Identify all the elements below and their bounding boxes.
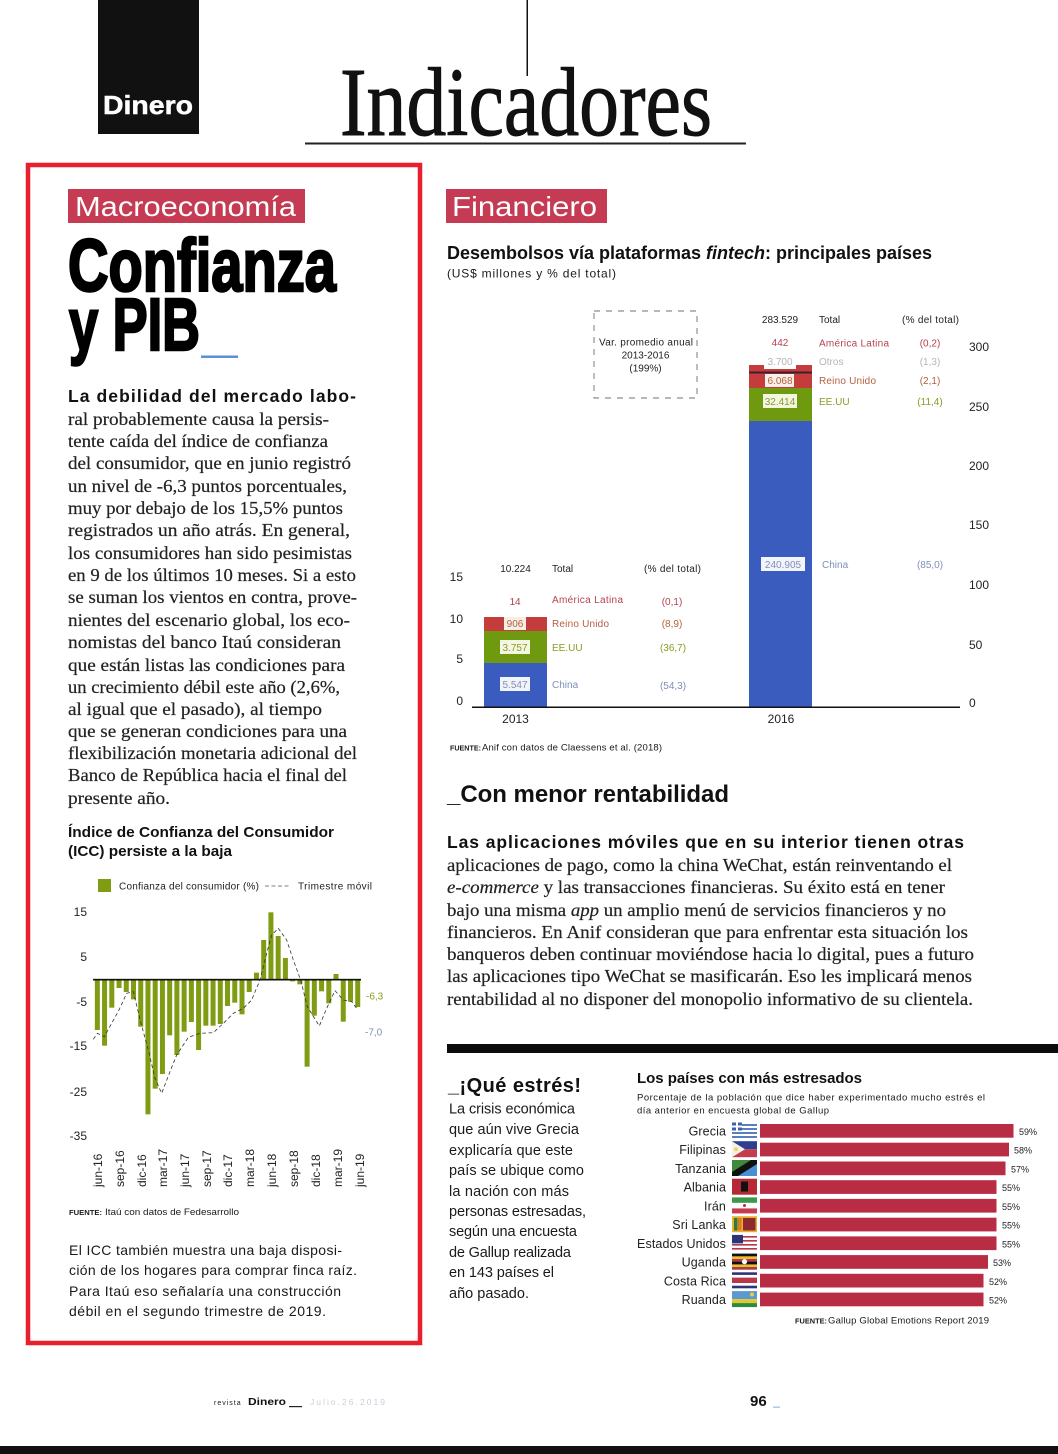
text block: financial article: bajo una misma app un amplio menú de servicios financieros y no — [447, 900, 946, 920]
text block: Qué estrés — [447, 1075, 586, 1302]
left axis: 2013 scale: 15 — [450, 570, 463, 584]
text block: ICC note: Para Itaú eso señalaría una construcción — [69, 1283, 341, 1299]
text block: financial article — [447, 832, 974, 1009]
data labels: 2013: 10.224 — [500, 564, 531, 575]
value labels: stress: 52% — [989, 1277, 1007, 1287]
text block: Qué estrés: en 143 países el — [449, 1265, 554, 1281]
data labels: 2013: Reino Unido — [552, 619, 609, 630]
chart title: fintech — [447, 243, 932, 280]
data labels: 2016: (% del total) — [902, 315, 959, 326]
data labels: 2016: 442 — [772, 338, 789, 349]
country labels: Filipinas — [679, 1143, 726, 1157]
text block: macro article — [68, 386, 357, 808]
flag: Costa Rica — [732, 1272, 757, 1288]
legend: ICC chart: Trimestre móvil — [298, 882, 372, 892]
data labels: 2013: EE.UU — [552, 643, 583, 654]
source: stress chart: Gallup Global Emotions Report 2019 — [828, 1316, 989, 1326]
text block: Qué estrés: de Gallup realizada — [449, 1245, 572, 1261]
right axis: 2016 scale: 200 — [969, 459, 989, 473]
data labels: 2016: (85,0) — [917, 560, 943, 571]
x axis: ICC chart: jun-18 — [265, 1153, 279, 1188]
bar: 2016 — [749, 357, 812, 707]
text block: financial article: aplicaciones de pago, como la china WeChat, están reinventando el — [447, 855, 952, 875]
bar: 2013 — [484, 617, 547, 707]
footer: Dinero — [248, 1396, 286, 1408]
logo: Dinero — [98, 0, 199, 134]
bar: 2013: 5.547 — [502, 680, 528, 691]
text block: Qué estrés: país se ubique como — [449, 1163, 584, 1179]
text block: Qué estrés: que aún vive Grecia — [449, 1122, 580, 1138]
y axis: ICC chart — [70, 905, 87, 1143]
data labels: 2013: China — [552, 680, 579, 691]
left axis: 2013 scale: 10 — [450, 612, 463, 626]
flag: Sri Lanka — [732, 1216, 757, 1232]
data labels: 2016: EE.UU — [819, 397, 850, 408]
value labels: stress: 55% — [1002, 1183, 1020, 1193]
y axis: ICC chart: -25 — [70, 1085, 87, 1099]
bar: 2016: 32.414 — [765, 397, 796, 408]
text block: financial article: financieros. En Anif consideran que para enfrentar esta situación los — [447, 922, 968, 942]
flag: Ruanda — [732, 1291, 757, 1307]
text block: macro article: tente caída del índice de confianza — [68, 431, 328, 451]
y axis: ICC chart: -35 — [70, 1129, 87, 1143]
data labels: 2013: 14 — [509, 597, 521, 608]
value labels: stress: 57% — [1011, 1164, 1029, 1174]
left axis: 2013 scale: 5 — [456, 652, 463, 666]
text block: financial article: banqueros deben continuar moviéndose hacia lo digital, pues a futuro — [447, 944, 974, 964]
text block: Qué estrés: _¡Qué estrés! — [447, 1075, 581, 1097]
right axis: 2016 scale: 0 — [969, 696, 976, 710]
text block: macro article: se suman los vientos en contra, prove- — [68, 587, 357, 607]
text block: ICC note: ción de los hogares para comprar finca raíz. — [69, 1262, 357, 1278]
text block: macro article: flexibilización monetaria adicional del — [68, 743, 357, 763]
panel: Macroeconomía — [28, 165, 420, 1343]
flag: Uganda — [732, 1254, 757, 1270]
x axis: years: 2016 — [768, 712, 795, 726]
y axis: ICC chart: 5 — [80, 950, 87, 964]
heading: Con menor rentabilidad: _Con menor rentabilidad — [446, 781, 729, 808]
x axis: ICC chart: mar-18 — [243, 1149, 257, 1187]
text block: macro article: registrados un año atrás. En general, — [68, 520, 350, 540]
right axis: 2016 scale: 50 — [969, 638, 983, 652]
text block: macro article: un nivel de -6,3 puntos porcentuales, — [68, 476, 347, 496]
bar: 2016: 240.905 — [765, 560, 802, 571]
source: stress chart: FUENTE: — [795, 1316, 827, 1326]
callout: average annual change — [594, 311, 697, 398]
country labels: Grecia — [689, 1124, 726, 1138]
section tag: Macroeconomía: Macroeconomía — [75, 191, 296, 222]
x axis: ICC chart: jun-19 — [353, 1153, 367, 1188]
footer: 96 — [750, 1393, 767, 1410]
callouts: latest values: -7,0 — [365, 1028, 383, 1038]
bar: 2013: 906 — [507, 619, 524, 630]
data labels: 2013 — [500, 564, 701, 692]
footer: revista — [214, 1400, 242, 1407]
data labels: 2013: América Latina — [552, 595, 623, 606]
legend: ICC chart — [98, 879, 372, 892]
text block: macro article: nomistas del banco Itaú consideran — [68, 632, 341, 652]
text block: macro article: los consumidores han sido pesimistas — [68, 543, 352, 563]
text block: macro article: que están listas las condiciones para — [68, 655, 345, 675]
text block: macro article: al igual que el pasado), al tiempo — [68, 699, 322, 720]
country labels — [637, 1124, 726, 1307]
legend: ICC chart: Confianza del consumidor (%) — [119, 882, 259, 892]
x axis: ICC chart: sep-17 — [200, 1150, 214, 1187]
x axis: ICC chart: dic-18 — [309, 1154, 323, 1187]
data labels: 2013: Total — [552, 564, 573, 575]
text block: Qué estrés: según una encuesta — [449, 1224, 578, 1240]
data labels: 2013: (8,9) — [662, 619, 682, 630]
chart title: stress: día anterior en encuesta global de Gallup — [637, 1106, 829, 1116]
y axis: ICC chart: -15 — [70, 1039, 87, 1053]
callout: average annual change: 2013-2016 — [622, 350, 670, 362]
text block: financial article: rentabilidad al no disponer del monopolio informativo de su clientela. — [447, 989, 973, 1009]
text block: Qué estrés: personas estresadas, — [449, 1204, 586, 1220]
flag: Irán — [732, 1197, 757, 1213]
chart title: stress — [637, 1070, 985, 1116]
x axis: ICC chart: sep-18 — [287, 1150, 301, 1187]
footer — [0, 1393, 1058, 1454]
data labels: 2016 — [762, 315, 959, 571]
value labels: stress: 58% — [1014, 1146, 1032, 1156]
callouts: latest values — [365, 992, 384, 1038]
heading: Confianza y PIB: Confianza — [68, 224, 337, 307]
flags — [732, 1122, 757, 1307]
data labels: 2016: Total — [819, 315, 840, 326]
data labels: 2016: Otros — [819, 357, 843, 368]
text block: Qué estrés: explicaría que este — [449, 1143, 573, 1159]
country labels: Ruanda — [682, 1293, 726, 1307]
text block: ICC note: El ICC también muestra una baja disposi- — [69, 1242, 342, 1258]
chart title: ICC — [68, 824, 334, 860]
text block: macro article: Banco de República hacia el final del — [68, 765, 347, 785]
flag: Grecia — [732, 1122, 757, 1138]
chart title: fintech: (US$ millones y % del total) — [447, 266, 616, 280]
country labels: Albania — [684, 1181, 726, 1195]
data labels: 2016: 283.529 — [762, 315, 799, 326]
data labels: 2016: (2,1) — [920, 376, 940, 387]
text block: macro article: ral probablemente causa la persis- — [68, 409, 329, 429]
x axis: years: 2013 — [502, 712, 529, 726]
chart title: stress: Porcentaje de la población que dice haber experimentado mucho estrés el — [637, 1092, 985, 1104]
data labels: 2013: (% del total) — [644, 564, 701, 575]
header — [98, 0, 746, 157]
bar chart: consumer confidence — [93, 912, 361, 1114]
text block: macro article: presente año. — [68, 788, 170, 808]
right axis: 2016 scale: 100 — [969, 578, 989, 592]
chart title: stress: Los países con más estresados — [637, 1070, 862, 1087]
source: ICC chart: Itaú con datos de Fedesarrollo — [105, 1207, 239, 1218]
bar chart: stress percentages — [760, 1124, 1014, 1306]
x axis: ICC chart: jun-17 — [178, 1153, 192, 1188]
flag: Filipinas — [732, 1141, 757, 1157]
text block: financial article: Las aplicaciones móviles que en su interior tienen otras — [447, 832, 964, 852]
text block: Qué estrés: la nación con más — [449, 1184, 569, 1200]
callout: average annual change: (199%) — [629, 364, 662, 374]
chart title: fintech: Desembolsos vía plataformas fintech: principales países — [447, 243, 932, 263]
data labels: 2016: América Latina — [819, 338, 889, 350]
country labels: Estados Unidos — [637, 1237, 726, 1251]
data labels: 2016: Reino Unido — [819, 376, 876, 387]
text block: macro article: en 9 de los últimos 10 meses. Si a esto — [68, 565, 356, 585]
logo: Dinero: Dinero — [103, 90, 193, 120]
right axis: 2016 scale: 250 — [969, 400, 989, 414]
x axis: ICC chart — [91, 1149, 367, 1188]
title: Indicadores: Indicadores — [340, 49, 712, 157]
data labels: 2016: (0,2) — [920, 338, 940, 350]
bar: 2016: 3.700 — [767, 357, 793, 368]
text block: Qué estrés: La crisis económica — [449, 1102, 576, 1118]
x axis: ICC chart: mar-17 — [156, 1149, 170, 1187]
value labels: stress: 55% — [1002, 1221, 1020, 1231]
data labels: 2013: (0,1) — [662, 597, 682, 608]
data labels: 2013: (36,7) — [660, 643, 686, 654]
section tag: Financiero: Financiero — [452, 191, 597, 222]
right axis: 2016 scale: 300 — [969, 340, 989, 354]
value labels: stress: 53% — [993, 1258, 1011, 1268]
value labels: stress: 59% — [1019, 1127, 1037, 1137]
country labels: Uganda — [682, 1256, 726, 1270]
value labels: stress: 52% — [989, 1296, 1007, 1306]
heading: Confianza y PIB: y PIB — [69, 283, 200, 366]
data labels: 2013: (54,3) — [660, 681, 686, 692]
data labels: 2016: (1,3) — [920, 357, 940, 368]
country labels: Sri Lanka — [672, 1218, 726, 1232]
text block: financial article: e-commerce y las transacciones financieras. Su éxito está en tener — [447, 877, 945, 897]
panel: Financiero — [446, 189, 989, 1009]
text block: financial article: las aplicaciones tipo WeChat se masificarán. Eso les implicará menos — [447, 966, 972, 986]
chart title: ICC: Índice de Confianza del Consumidor — [68, 824, 334, 841]
divider bar — [447, 1044, 1058, 1053]
heading: Confianza y PIB — [68, 224, 337, 366]
text block: macro article: que se generan condiciones para una — [68, 721, 347, 741]
flag: Tanzania — [732, 1160, 757, 1176]
source: fintech chart: FUENTE: — [450, 744, 481, 752]
flag: Albania — [732, 1179, 757, 1195]
footer: Julio.26.2019 — [310, 1397, 385, 1407]
x axis: ICC chart: jun-16 — [91, 1153, 105, 1188]
data labels: 2016: (11,4) — [917, 397, 943, 408]
text block: macro article: muy por debajo de los 15,5% puntos — [68, 498, 343, 518]
right axis: 2016 scale: 150 — [969, 518, 989, 532]
text block: macro article: nientes del escenario global, los eco- — [68, 610, 350, 630]
value labels: stress: 55% — [1002, 1239, 1020, 1249]
y axis: ICC chart: 15 — [74, 905, 87, 919]
chart title: ICC: (ICC) persiste a la baja — [68, 843, 233, 860]
bar: 2013: 3.757 — [502, 643, 528, 654]
x axis: ICC chart: dic-16 — [135, 1154, 149, 1187]
callouts: latest values: -6,3 — [366, 992, 384, 1002]
text block: macro article: del consumidor, que en junio registró — [68, 453, 351, 473]
right axis: 2016 scale — [969, 340, 989, 710]
x axis: ICC chart: mar-19 — [331, 1149, 345, 1187]
left axis: 2013 scale: 0 — [456, 694, 463, 708]
value labels: stress: 55% — [1002, 1202, 1020, 1212]
panel: most stressed countries — [637, 1070, 1037, 1326]
x axis: ICC chart: dic-17 — [221, 1154, 235, 1187]
source: ICC chart: FUENTE: — [69, 1208, 102, 1217]
text block: ICC note: débil en el segundo trimestre de 2019. — [69, 1303, 326, 1319]
callout: average annual change: Var. promedio anual — [599, 338, 693, 348]
value labels: stress — [989, 1127, 1037, 1306]
x axis: years — [472, 706, 960, 726]
x axis: ICC chart: sep-16 — [113, 1150, 127, 1187]
text block: macro article: La debilidad del mercado labo- — [68, 386, 356, 406]
bar: 2016: 6.068 — [767, 376, 793, 387]
country labels: Tanzania — [675, 1162, 726, 1176]
text block: ICC note — [69, 1242, 357, 1319]
source: fintech chart: Anif con datos de Claessens et al. (2018) — [482, 742, 662, 754]
data labels: 2016: China — [822, 560, 849, 571]
country labels: Irán — [704, 1199, 726, 1213]
flag: Estados Unidos — [732, 1235, 757, 1251]
left axis: 2013 scale — [450, 570, 463, 708]
text block: macro article: un crecimiento débil este año (2,6%, — [68, 677, 340, 698]
country labels: Costa Rica — [664, 1274, 726, 1288]
y axis: ICC chart: -5 — [76, 995, 87, 1009]
text block: Qué estrés: año pasado. — [449, 1286, 529, 1302]
